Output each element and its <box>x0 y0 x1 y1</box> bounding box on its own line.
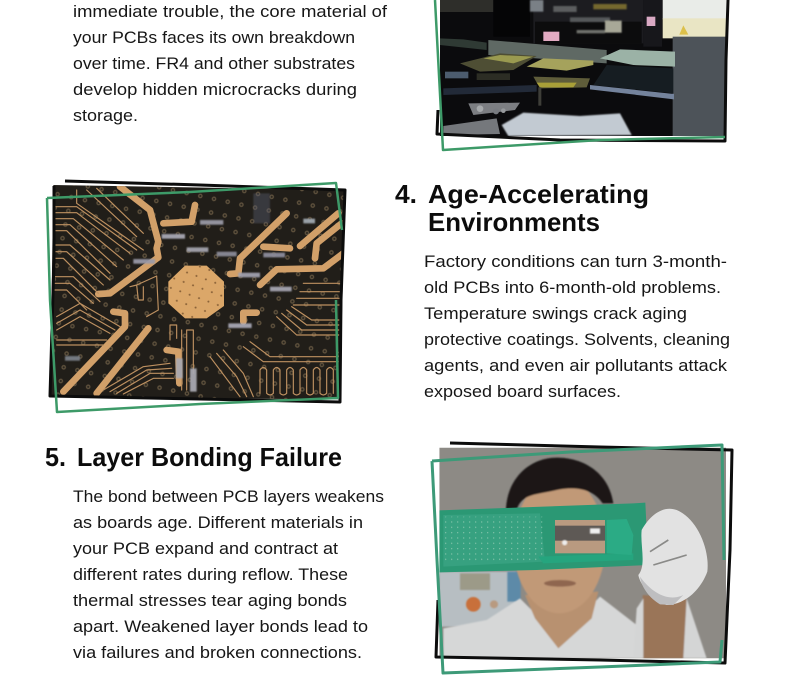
text block: section 4 body <box>424 252 730 401</box>
text block: section 5 body: apart. Weakened layer bonds lead to <box>73 617 368 636</box>
text block: section 4 body: Temperature swings crack aging <box>424 304 687 323</box>
heading: 4. Age-Accelerating Environments: Age-Accelerating <box>428 179 649 209</box>
text block: section 4 body: Factory conditions can turn 3-month- <box>424 252 727 271</box>
text block: section 4 body: agents, and even air pollutants attack <box>424 356 728 375</box>
heading: 5. Layer Bonding Failure: Layer Bonding Failure <box>77 442 342 472</box>
text block: section 4 body: exposed board surfaces. <box>424 382 621 401</box>
text block: section 5 body: via failures and broken connections. <box>73 643 362 662</box>
image: gold PCB traces <box>47 180 347 403</box>
frame: technician photo sketch border <box>432 443 732 673</box>
image: PCB assembly machine <box>440 0 727 137</box>
heading: 4. Age-Accelerating Environments: 4. <box>395 179 417 209</box>
text block: section 5 body: thermal stresses tear aging bonds <box>73 591 347 610</box>
text block: section 3 continued: immediate trouble, the core material of <box>73 2 387 21</box>
text block: section 5 body: different rates during reflow. These <box>73 565 348 584</box>
text block: section 4 body: old PCBs into 6-month-old problems. <box>424 278 721 297</box>
text block: section 3 continued: storage. <box>73 106 138 125</box>
heading: 4. Age-Accelerating Environments <box>395 179 649 237</box>
text block: section 3 continued <box>73 2 387 125</box>
heading: 4. Age-Accelerating Environments: Environments <box>428 207 600 237</box>
text block: section 4 body: protective coatings. Solvents, cleaning <box>424 330 730 349</box>
text block: section 5 body <box>73 487 384 662</box>
text block: section 3 continued: your PCBs faces its own breakdown <box>73 28 355 47</box>
image: technician inspecting green PCB <box>439 448 726 658</box>
heading: 5. Layer Bonding Failure: 5. <box>45 442 66 472</box>
text block: section 3 continued: over time. FR4 and other substrates <box>73 54 355 73</box>
text block: section 5 body: The bond between PCB layers weakens <box>73 487 384 506</box>
frame: PCB traces photo sketch border <box>47 181 345 412</box>
text block: section 3 continued: develop hidden microcracks during <box>73 80 357 99</box>
text block: section 5 body: as boards age. Different materials in <box>73 513 363 532</box>
text block: section 5 body: your PCB expand and contract at <box>73 539 338 558</box>
frame: machine photo sketch border <box>435 0 728 150</box>
